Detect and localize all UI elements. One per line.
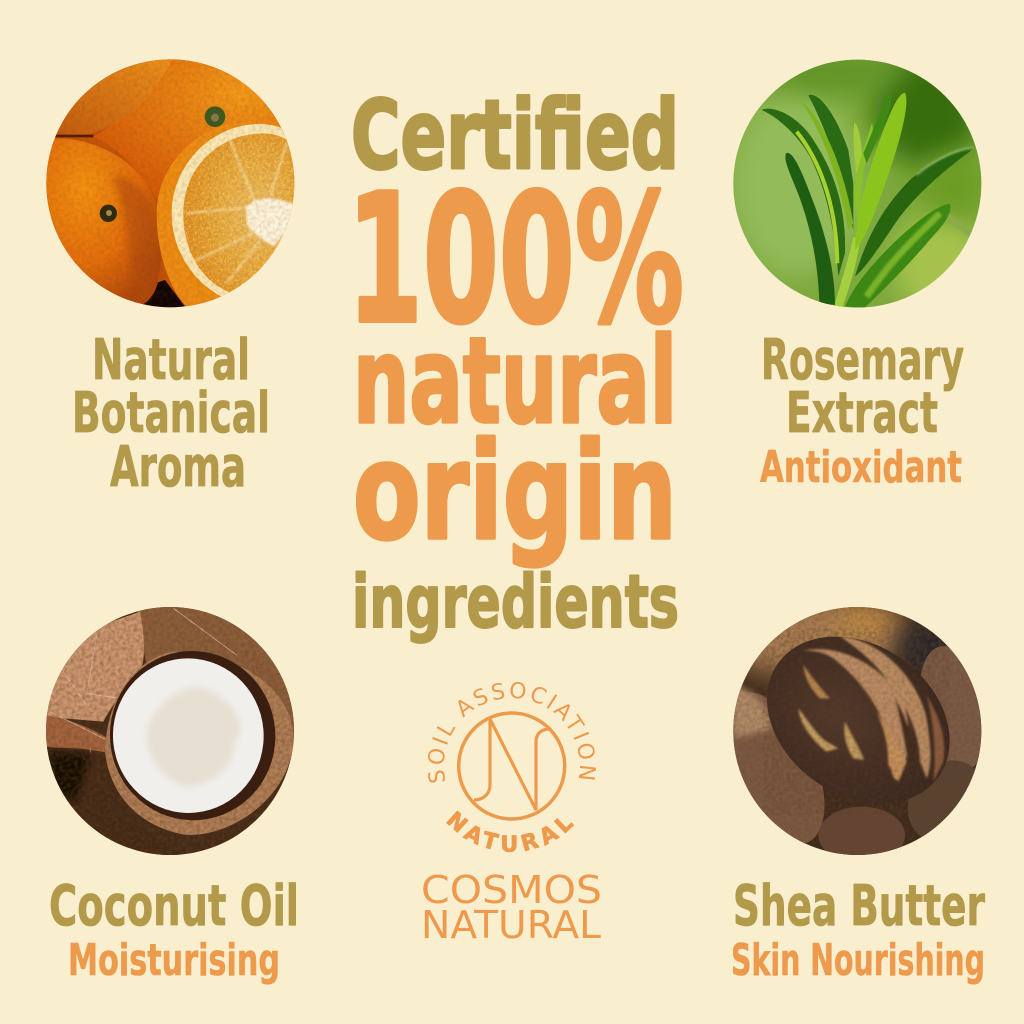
logo: soil association natural	[428, 682, 596, 852]
leaf tall	[863, 92, 891, 163]
leaf far left	[785, 153, 835, 305]
photo: oranges	[46, 59, 294, 308]
wood lower left	[47, 747, 183, 862]
label: natural botanical aroma: Aroma	[110, 435, 246, 500]
leaf 3	[808, 95, 853, 230]
title: origin: origin	[353, 414, 677, 570]
logo: soil association natural: SOIL ASSOCIATION	[428, 682, 596, 783]
leaf right	[855, 148, 974, 277]
label: natural botanical aroma: Botanical	[72, 381, 270, 446]
half orange flesh	[183, 133, 297, 293]
stem	[834, 237, 860, 307]
left husk	[43, 612, 144, 722]
hollow	[147, 687, 241, 787]
outer husk right	[105, 652, 293, 835]
dark shell	[110, 651, 276, 820]
logo text: cosmos natural: NATURAL	[421, 903, 601, 947]
main nut	[767, 636, 950, 799]
half orange centre pith	[247, 198, 300, 247]
label: rosemary extract: Extract	[786, 381, 938, 446]
leaf inner young	[853, 123, 863, 173]
logo text: cosmos natural	[421, 868, 602, 947]
label: rosemary extract	[760, 328, 964, 493]
orange stem top	[205, 106, 225, 127]
right bean	[920, 646, 982, 768]
label: natural botanical aroma	[72, 328, 270, 500]
bottom bean	[818, 806, 905, 855]
leaf 2	[762, 109, 845, 277]
label: natural botanical aroma: Natural	[92, 328, 250, 393]
label: shea butter	[731, 874, 985, 986]
leaf lower	[845, 204, 950, 307]
label: coconut oil: Coconut Oil	[49, 874, 299, 939]
label: coconut oil	[49, 874, 299, 986]
photo: rosemary	[733, 60, 982, 308]
left bean	[733, 692, 824, 844]
photo: coconut	[46, 607, 294, 855]
logo: soil association natural: NATURAL	[446, 810, 574, 852]
logo text: cosmos natural: COSMOS	[421, 868, 602, 912]
top husk	[137, 605, 297, 742]
title: natural: natural	[353, 313, 677, 451]
white meat	[112, 658, 264, 813]
top left orange	[56, 59, 172, 135]
back orange	[93, 57, 303, 200]
title: certified: Certified	[351, 81, 679, 191]
title: 100%: 100%	[347, 156, 684, 363]
orange stem left	[100, 205, 117, 222]
photo: shea butter	[733, 607, 982, 855]
title: ingredients: ingredients	[352, 560, 679, 645]
half orange rim	[157, 122, 303, 307]
label: coconut oil: Moisturising	[68, 935, 280, 986]
nut stripes	[798, 637, 944, 782]
left orange	[43, 139, 161, 307]
